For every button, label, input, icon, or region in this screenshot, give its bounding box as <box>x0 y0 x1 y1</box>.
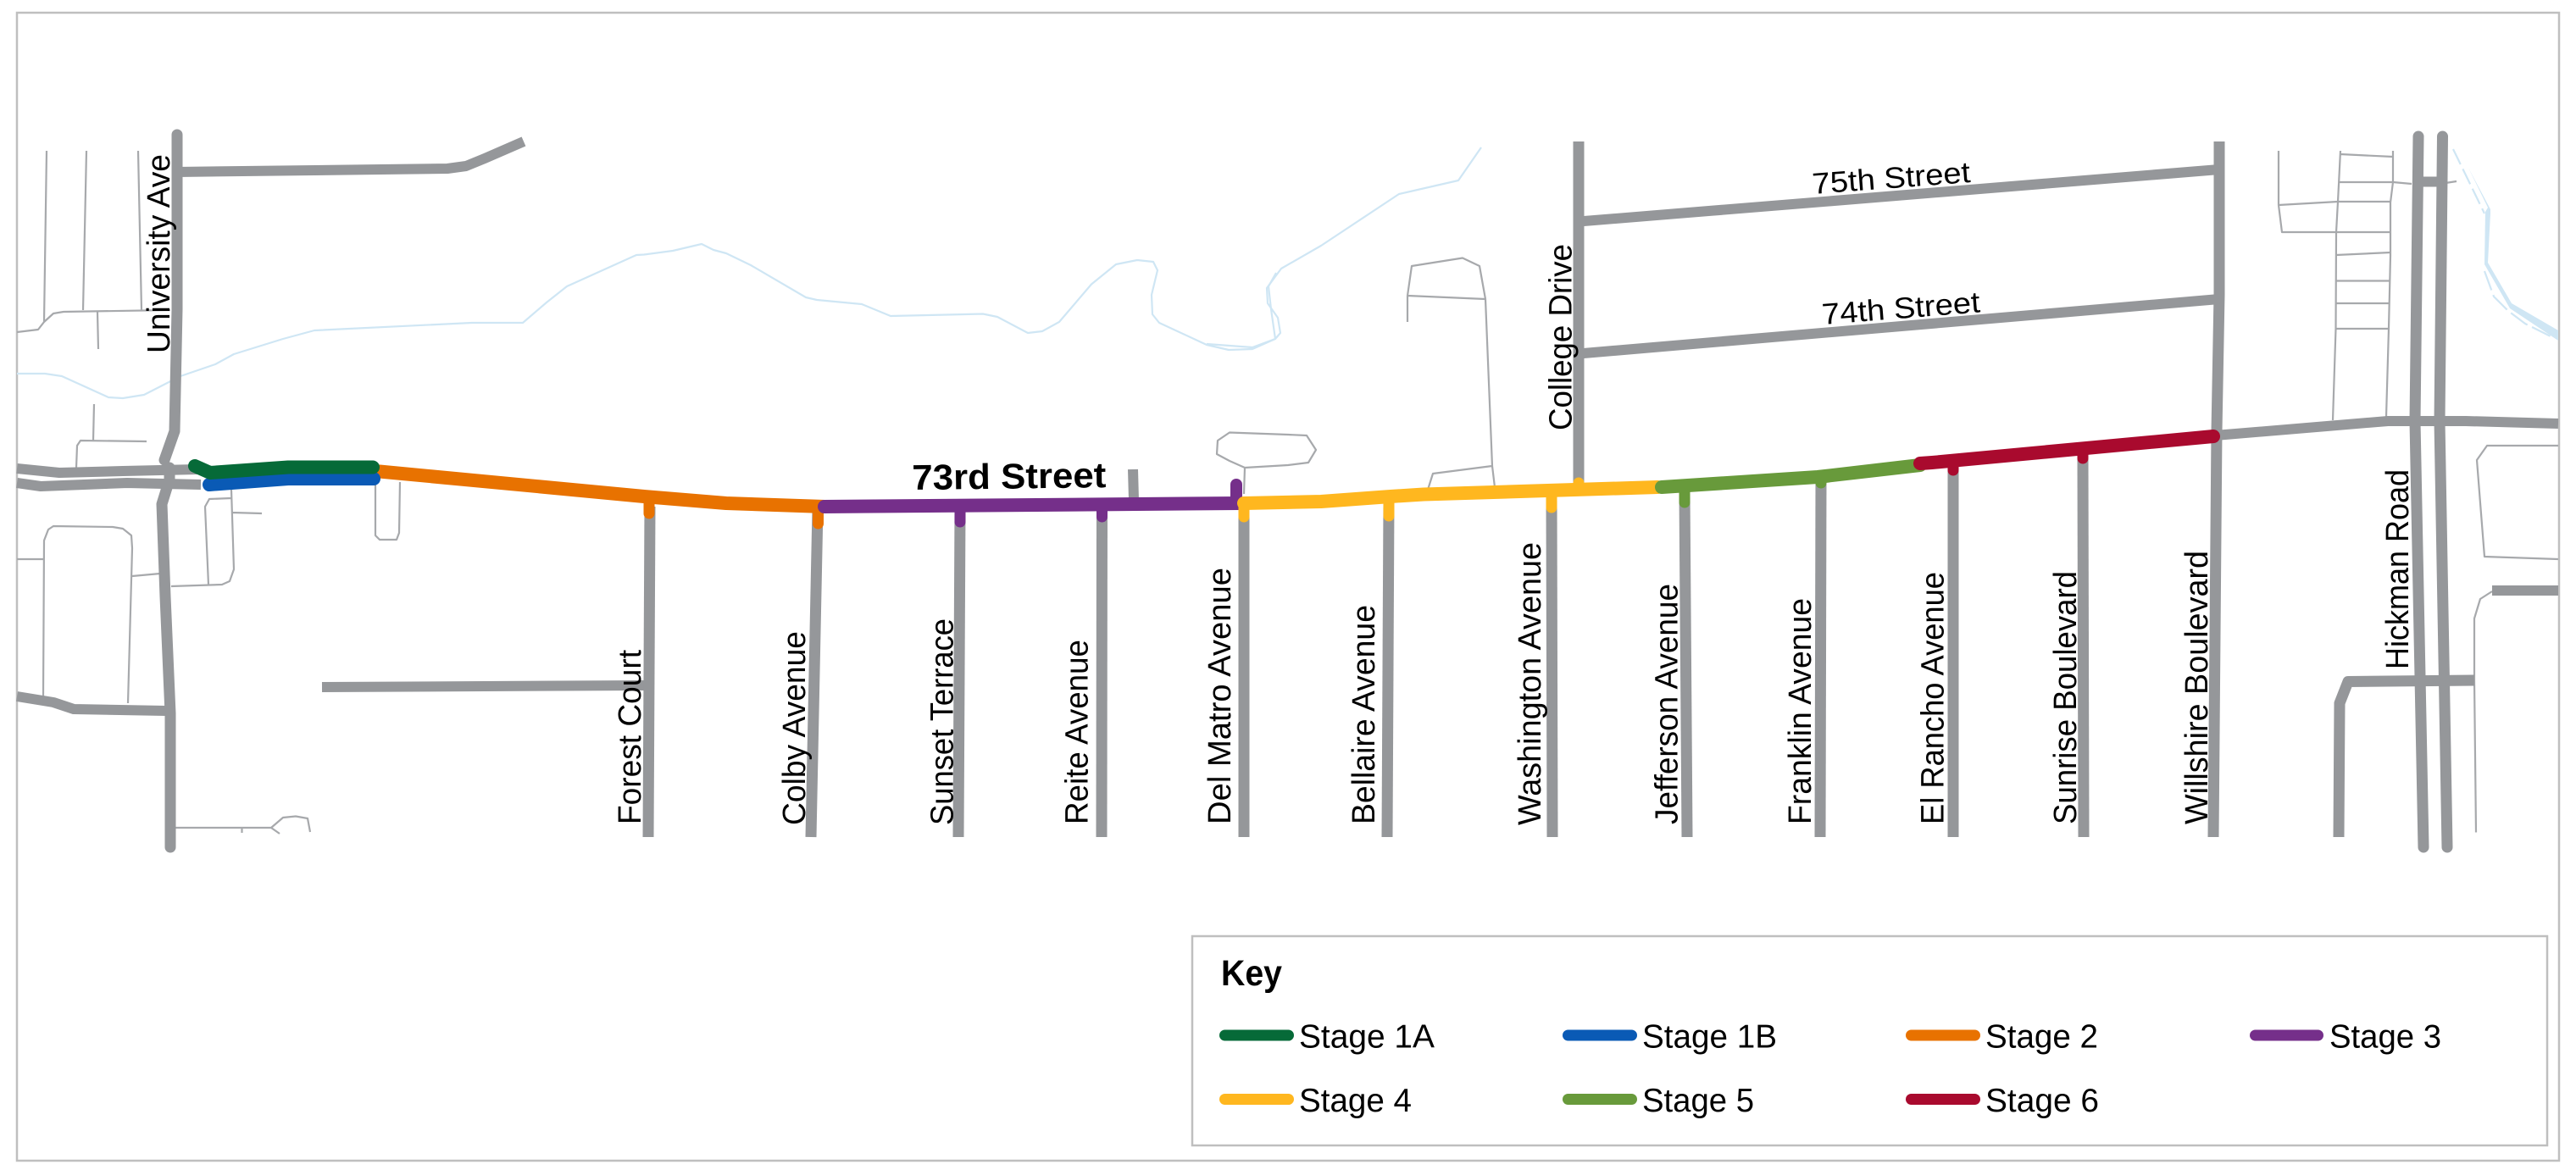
road: Willshire Boulevard <box>2213 141 2219 837</box>
key item: Stage 4: Stage 4 <box>1299 1083 1412 1119</box>
major grey streets <box>17 135 2558 847</box>
key item: Stage 1A: Stage 1A <box>1299 1018 1435 1056</box>
road: west lower street <box>17 696 166 711</box>
road: Franklin Avenue <box>1820 479 1821 837</box>
label: Bellaire Avenue: Bellaire Avenue <box>1346 605 1382 824</box>
label: Hickman Road: Hickman Road <box>2380 469 2416 669</box>
label: Sunset Terrace: Sunset Terrace <box>925 618 961 825</box>
road: Sunset Terrace <box>958 508 960 837</box>
creek <box>17 147 1481 398</box>
road: 74th Street <box>1579 299 2219 354</box>
label: Jefferson Avenue: Jefferson Avenue <box>1649 584 1685 824</box>
key item: Stage 2: Stage 2 <box>1985 1018 2098 1056</box>
road: 75th Street <box>1579 169 2219 222</box>
label: Reite Avenue: Reite Avenue <box>1059 640 1095 824</box>
key item: Stage 1A <box>1219 1018 1435 1056</box>
label: Franklin Avenue: Franklin Avenue <box>1783 598 1818 824</box>
label: Forest Court: Forest Court <box>613 650 648 824</box>
key panel <box>1192 936 2547 1145</box>
label: El Rancho Avenue: El Rancho Avenue <box>1915 572 1951 824</box>
key item: Stage 1B: Stage 1B <box>1642 1018 1777 1056</box>
road: south-east street <box>2339 680 2474 837</box>
label: 74th Street: 74th Street <box>1821 286 1981 331</box>
stage 3 route <box>824 485 1240 522</box>
stage 1B route <box>209 479 374 485</box>
key item: Stage 5 <box>1563 1083 1754 1119</box>
label: University Ave: University Ave <box>142 154 177 353</box>
street labels <box>142 154 2416 825</box>
road: short stub north of 73rd <box>1133 469 1134 500</box>
east waterway <box>2453 149 2558 341</box>
road: Jefferson Avenue <box>1685 491 1687 837</box>
road: College Drive <box>1573 141 1585 487</box>
label: 73rd Street: 73rd Street <box>912 455 1107 497</box>
minor streets <box>17 151 2558 834</box>
stage 5 route <box>1662 465 1920 502</box>
road: east 73rd <box>2215 421 2558 435</box>
label: Colby Avenue: Colby Avenue <box>777 631 813 825</box>
label: Sunrise Boulevard: Sunrise Boulevard <box>2048 571 2084 824</box>
key item: Stage 6: Stage 6 <box>1985 1083 2099 1119</box>
stage 2 route <box>380 471 824 524</box>
key item: Stage 2 <box>1906 1018 2098 1056</box>
key item: Stage 3: Stage 3 <box>2329 1018 2441 1056</box>
label: Washington Avenue: Washington Avenue <box>1513 542 1548 825</box>
road: east short street <box>2492 585 2558 596</box>
road: Reite Avenue <box>1096 508 1108 837</box>
key item: Stage 1B <box>1563 1018 1777 1056</box>
key heading: Key <box>1221 953 1282 994</box>
stage 1A route <box>195 466 373 473</box>
road: Sunrise Boulevard <box>2083 457 2084 837</box>
key item: Stage 4 <box>1219 1083 1412 1119</box>
road: Hickman Road west lane <box>2415 136 2423 847</box>
road: Del Matro Avenue <box>1239 508 1249 837</box>
road: Forest Court spur <box>322 685 644 687</box>
road: north branch <box>177 141 524 172</box>
road: El Rancho Avenue <box>1947 466 1959 837</box>
key item: Stage 5: Stage 5 <box>1642 1083 1754 1119</box>
stage 4 route <box>1244 483 1657 517</box>
key item: Stage 6 <box>1906 1083 2099 1119</box>
road: west 73rd pair <box>17 469 201 486</box>
road: Bellaire Avenue <box>1387 500 1389 837</box>
label: 75th Street: 75th Street <box>1811 156 1972 201</box>
road: Colby Avenue <box>811 508 818 837</box>
road: Hickman connector <box>2418 176 2442 186</box>
label: College Drive: College Drive <box>1544 244 1579 430</box>
key item: Stage 3 <box>2250 1018 2441 1056</box>
road: Hickman Road east lane <box>2440 136 2447 847</box>
stage 6 route <box>1920 436 2213 470</box>
road: Forest Court <box>648 507 650 837</box>
label: Willshire Boulevard: Willshire Boulevard <box>2179 551 2215 824</box>
label: Del Matro Avenue: Del Matro Avenue <box>1202 568 1238 824</box>
road: University Ave <box>162 135 177 847</box>
